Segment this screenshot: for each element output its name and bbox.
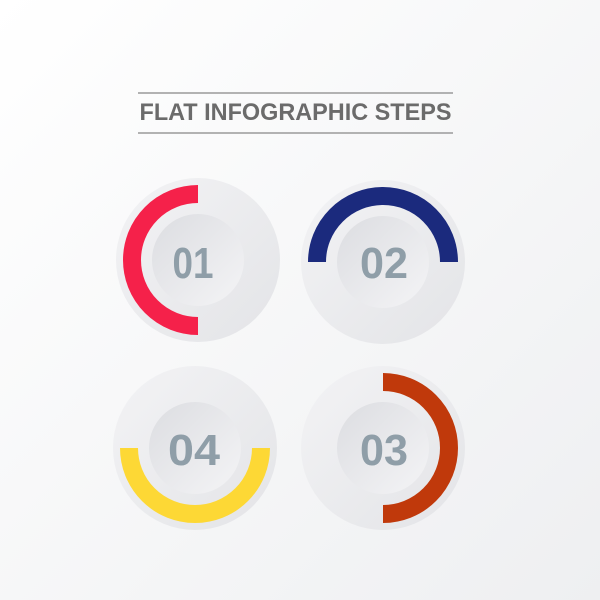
step 04: 04: [168, 426, 221, 475]
step 02: [301, 180, 465, 344]
step 01: 01: [172, 239, 214, 288]
title: FLAT INFOGRAPHIC STEPS: [140, 99, 452, 126]
step 01: [116, 178, 280, 342]
step 04: [113, 366, 277, 530]
step 03: [301, 366, 465, 530]
step 03: 03: [360, 426, 408, 475]
step 02: 02: [360, 239, 408, 288]
